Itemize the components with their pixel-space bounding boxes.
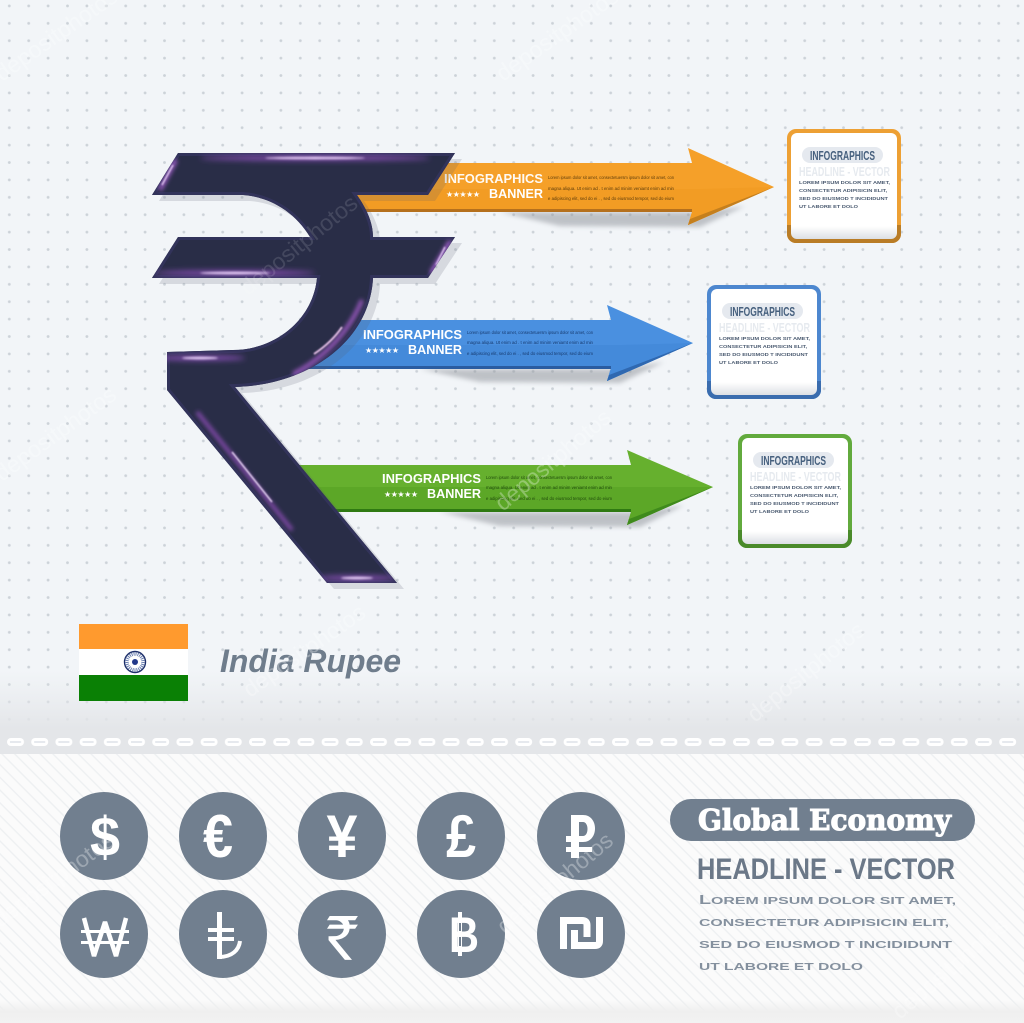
banner body text: magna aliqua. Ut enim ad . t enim ad minim veniamt enim ad min (467, 340, 593, 345)
icon: yen: ¥ (326, 803, 358, 870)
watermarks: depositphotos (235, 190, 362, 300)
stitched divider band (0, 730, 1024, 754)
banner title: BANNER (408, 342, 463, 357)
badge: Global Economy (670, 799, 975, 841)
body text: UT LABORE ET DOLO (699, 961, 863, 973)
banner body text: Lorem ipsum dolor sit amet, consectetuersm ipsum dolor sit amet, con (467, 330, 593, 335)
card: blue: LOREM IPSUM DOLOR SIT AMET, (719, 336, 811, 342)
banner body text: Lorem ipsum dolor sit amet, consectetuersm ipsum dolor sit amet, con (548, 175, 674, 180)
icon: dollar: $ (90, 805, 120, 868)
card: orange: LOREM IPSUM DOLOR SIT AMET, (799, 180, 891, 186)
card: orange: SED DO EIUSMOD T INCIDIDUNT (799, 196, 888, 202)
icon: baht (417, 890, 505, 978)
card: blue (707, 285, 821, 399)
card: orange: CONSECTETUR ADIPISICIN ELIT, (799, 188, 888, 194)
icon: yen (298, 792, 386, 880)
banner body text (467, 330, 593, 356)
body text: CONSECTETUR ADIPISICIN ELIT, (699, 917, 949, 929)
headline: HEADLINE - VECTOR (697, 853, 955, 886)
banner title: ★★★★★ (446, 190, 480, 199)
card: green: LOREM IPSUM DOLOR SIT AMET, (750, 485, 842, 491)
currency icons (60, 792, 625, 978)
card: green: INFOGRAPHICS (761, 453, 826, 468)
icon: pound (417, 792, 505, 880)
icon: baht: B (449, 907, 479, 963)
body text: SED DO EIUSMOD T INCIDIDUNT (699, 939, 953, 951)
banner title (363, 327, 463, 357)
card: blue: UT LABORE ET DOLO (719, 360, 778, 366)
banner title: ★★★★★ (365, 346, 399, 355)
badge: Global Economy: Global Economy (698, 803, 952, 837)
card: orange: UT LABORE ET DOLO (799, 204, 858, 210)
icon: lira (179, 890, 267, 978)
blue arrow banner (302, 305, 693, 383)
card: orange: HEADLINE - VECTOR (799, 164, 890, 179)
orange arrow banner (345, 148, 774, 227)
banner body text: Lorem ipsum dolor sit amet, consectetuersm ipsum dolor sit amet, con (486, 475, 612, 480)
icon: euro (179, 792, 267, 880)
card: green: UT LABORE ET DOLO (750, 509, 809, 515)
banner body text: magna aliqua. Ut enim ad . t enim ad minim veniamt enim ad min (486, 485, 612, 490)
banner body text: magna aliqua. Ut enim ad . t enim ad minim veniamt enim ad min (548, 186, 674, 191)
icon: won (60, 890, 148, 978)
card: orange (787, 129, 901, 243)
watermarks: depositphotos (742, 617, 869, 727)
card: blue: SED DO EIUSMOD T INCIDIDUNT (719, 352, 808, 358)
label: India Rupee: India Rupee (220, 643, 401, 679)
banner title: ★★★★★ (384, 490, 418, 499)
background: upper dotted panel (0, 0, 1024, 732)
icon: dollar (60, 792, 148, 880)
large rupee symbol (152, 153, 462, 589)
card: green: HEADLINE - VECTOR (750, 469, 841, 484)
watermarks: depositphotos (490, 404, 616, 516)
banner title: INFOGRAPHICS (382, 471, 481, 486)
banner body text: e adipiscing elit, sed do ei . , sed do eiusmod tempor, sed do eium (467, 351, 593, 356)
watermarks: depositphotos (238, 599, 370, 702)
body text (699, 892, 956, 973)
banner title: INFOGRAPHICS (444, 171, 543, 186)
body text: L OREM IPSUM DOLOR SIT AMET, (699, 892, 956, 907)
banner body text: e adipiscing elit, sed do ei . , sed do eiusmod tempor, sed do eium (548, 196, 674, 201)
icon: rupee (298, 890, 386, 978)
card: blue: CONSECTETUR ADIPISICIN ELIT, (719, 344, 808, 350)
watermarks: depositphotos (492, 827, 618, 939)
banner title (444, 171, 544, 201)
icon: euro: € (203, 803, 233, 870)
card: orange: INFOGRAPHICS (810, 148, 875, 163)
icon: pound: £ (446, 803, 476, 870)
icon: shekel (537, 890, 625, 978)
watermarks: depositphotos (887, 912, 1013, 1023)
green arrow banner (290, 450, 713, 527)
banner title: BANNER (489, 186, 544, 201)
banner body text (486, 475, 612, 501)
icon: India flag (79, 624, 188, 701)
card: blue: INFOGRAPHICS (730, 304, 795, 319)
banner body text: e adipiscing elit, sed do ei . , sed do eiusmod tempor, sed do eium (486, 496, 612, 501)
card: green: SED DO EIUSMOD T INCIDIDUNT (750, 501, 839, 507)
background: lower striped panel (0, 754, 1024, 1023)
banner body text (548, 175, 674, 201)
banner title: BANNER (427, 486, 482, 501)
card: blue: HEADLINE - VECTOR (719, 320, 810, 335)
banner title: INFOGRAPHICS (363, 327, 462, 342)
card: green: CONSECTETUR ADIPISICIN ELIT, (750, 493, 839, 499)
card: green (738, 434, 852, 548)
icon: ruble (537, 792, 625, 880)
banner title (382, 471, 482, 501)
